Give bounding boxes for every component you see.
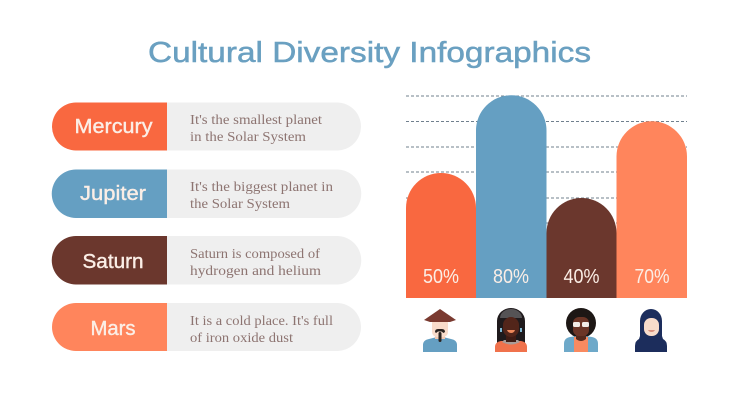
panel: Mercury row: Mercury [74,116,152,138]
bar: 70%: 70% [634,266,670,288]
panel: Mars row [52,303,361,351]
icon: woman with navy hijab [635,309,667,352]
bar: 40%: 40% [564,266,600,288]
panel: Mars row: It is a cold place. It's full [190,313,333,328]
bar: 80% [476,95,546,298]
chart: bar chart [406,95,687,298]
panel: Saturn row [52,236,361,284]
panel: Saturn row: Saturn [82,251,144,273]
icon: woman with dark skin and long hair [495,308,527,352]
panel: Jupiter row: the Solar System [190,196,291,211]
panel: Mercury row: in the Solar System [190,129,307,144]
panel: Jupiter row [52,170,361,218]
bar: 50% [406,173,476,298]
bar: 40% [546,198,616,298]
title: Cultural Diversity Infographics [148,37,591,69]
bar: 50%: 50% [423,266,459,288]
panel: Jupiter row: It's the biggest planet in [190,179,333,194]
panel: Mercury row: It's the smallest planet [190,112,322,127]
panel: Jupiter row: Jupiter [80,183,146,205]
panel: Saturn row: Saturn is composed of [190,246,321,261]
bar: 80%: 80% [493,266,529,288]
panel: Mars row: Mars [90,318,136,340]
panel: Mars row: of iron oxide dust [190,330,293,345]
bar: 70% [616,121,687,298]
icon: man with conical hat [423,309,457,352]
panel: Saturn row: hydrogen and helium [190,263,322,278]
panel: Mercury row [52,102,361,150]
icon: man with afro and glasses [564,308,598,352]
